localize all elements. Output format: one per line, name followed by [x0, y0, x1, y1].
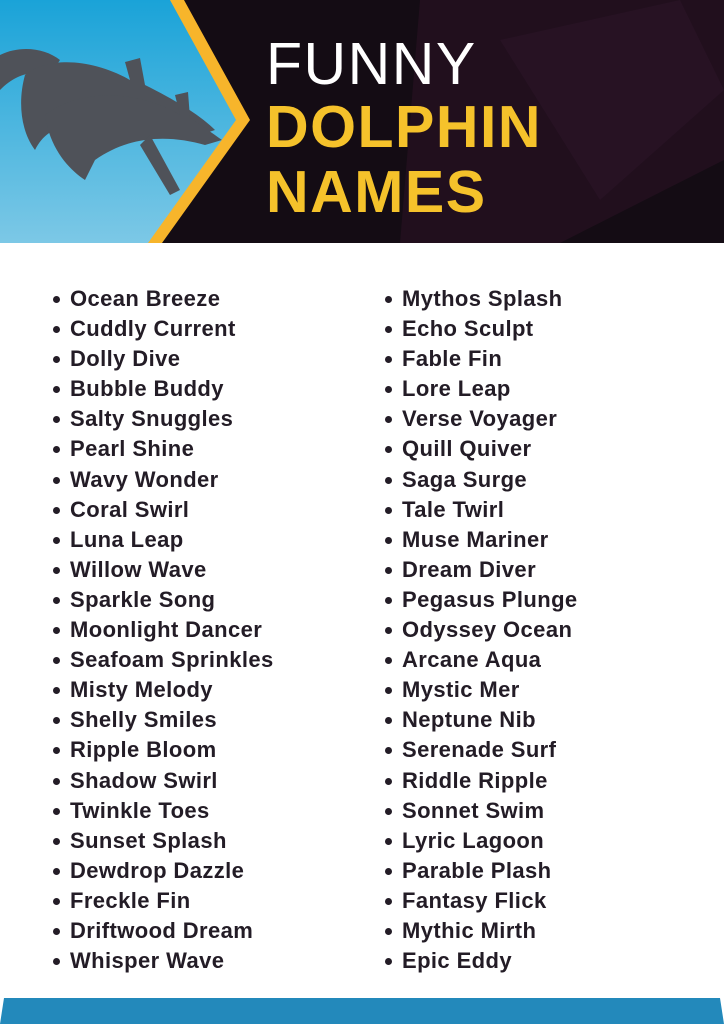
- list: left column: Twinkle Toes: [70, 798, 210, 823]
- list: right column: Fantasy Flick: [402, 888, 547, 913]
- list: left column: Luna Leap: [70, 527, 184, 552]
- list: left column: Whisper Wave: [70, 948, 224, 973]
- list: right column: Tale Twirl: [402, 497, 504, 522]
- list: right column: Arcane Aqua: [402, 647, 541, 672]
- list: left column: Salty Snuggles: [70, 406, 233, 431]
- list: right column: Fable Fin: [402, 346, 502, 371]
- list: left column: Willow Wave: [70, 557, 207, 582]
- list: right column: Neptune Nib: [402, 707, 536, 732]
- list: right column: Mythos Splash: [402, 286, 562, 311]
- list: left column: Cuddly Current: [70, 316, 236, 341]
- list: right column: Saga Surge: [402, 467, 527, 492]
- list: left column: Pearl Shine: [70, 436, 194, 461]
- list: left column: Freckle Fin: [70, 888, 191, 913]
- list: right column: [385, 286, 578, 973]
- list: right column: Sonnet Swim: [402, 798, 545, 823]
- list: left column: Ripple Bloom: [70, 737, 217, 762]
- list: left column: Sunset Splash: [70, 828, 227, 853]
- list: left column: Shelly Smiles: [70, 707, 217, 732]
- list: right column: Epic Eddy: [402, 948, 512, 973]
- chevron: [148, 0, 250, 243]
- list: left column: Wavy Wonder: [70, 467, 219, 492]
- list: right column: Quill Quiver: [402, 436, 532, 461]
- list: right column: Dream Diver: [402, 557, 536, 582]
- list: left column: Moonlight Dancer: [70, 617, 262, 642]
- list: left column: Misty Melody: [70, 677, 213, 702]
- list: right column: Echo Sculpt: [402, 316, 534, 341]
- list: left column: Ocean Breeze: [70, 286, 220, 311]
- list: right column: Lyric Lagoon: [402, 828, 544, 853]
- list: right column: Lore Leap: [402, 376, 511, 401]
- list: left column: Bubble Buddy: [70, 376, 224, 401]
- list: right column: Pegasus Plunge: [402, 587, 578, 612]
- list: left column: Dolly Dive: [70, 346, 180, 371]
- list: left column: Sparkle Song: [70, 587, 215, 612]
- list: right column: Mythic Mirth: [402, 918, 536, 943]
- list: right column: Odyssey Ocean: [402, 617, 572, 642]
- footer bar: [0, 998, 724, 1024]
- list: left column: Dewdrop Dazzle: [70, 858, 244, 883]
- list: left column: Seafoam Sprinkles: [70, 647, 274, 672]
- title: NAMES: [266, 159, 487, 225]
- list: right column: Muse Mariner: [402, 527, 549, 552]
- title: DOLPHIN: [266, 94, 542, 160]
- list: right column: Riddle Ripple: [402, 768, 548, 792]
- title: FUNNY: [266, 31, 477, 97]
- list: right column: Mystic Mer: [402, 677, 520, 702]
- list: left column: Coral Swirl: [70, 497, 189, 522]
- list: right column: Verse Voyager: [402, 406, 557, 431]
- dolphins: [0, 49, 222, 195]
- list: right column: Serenade Surf: [402, 737, 556, 762]
- list: left column: [53, 286, 274, 973]
- title: [266, 31, 542, 225]
- list: left column: Driftwood Dream: [70, 918, 253, 943]
- header: [0, 0, 724, 243]
- list: right column: Parable Plash: [402, 858, 552, 883]
- list: left column: Shadow Swirl: [70, 768, 218, 792]
